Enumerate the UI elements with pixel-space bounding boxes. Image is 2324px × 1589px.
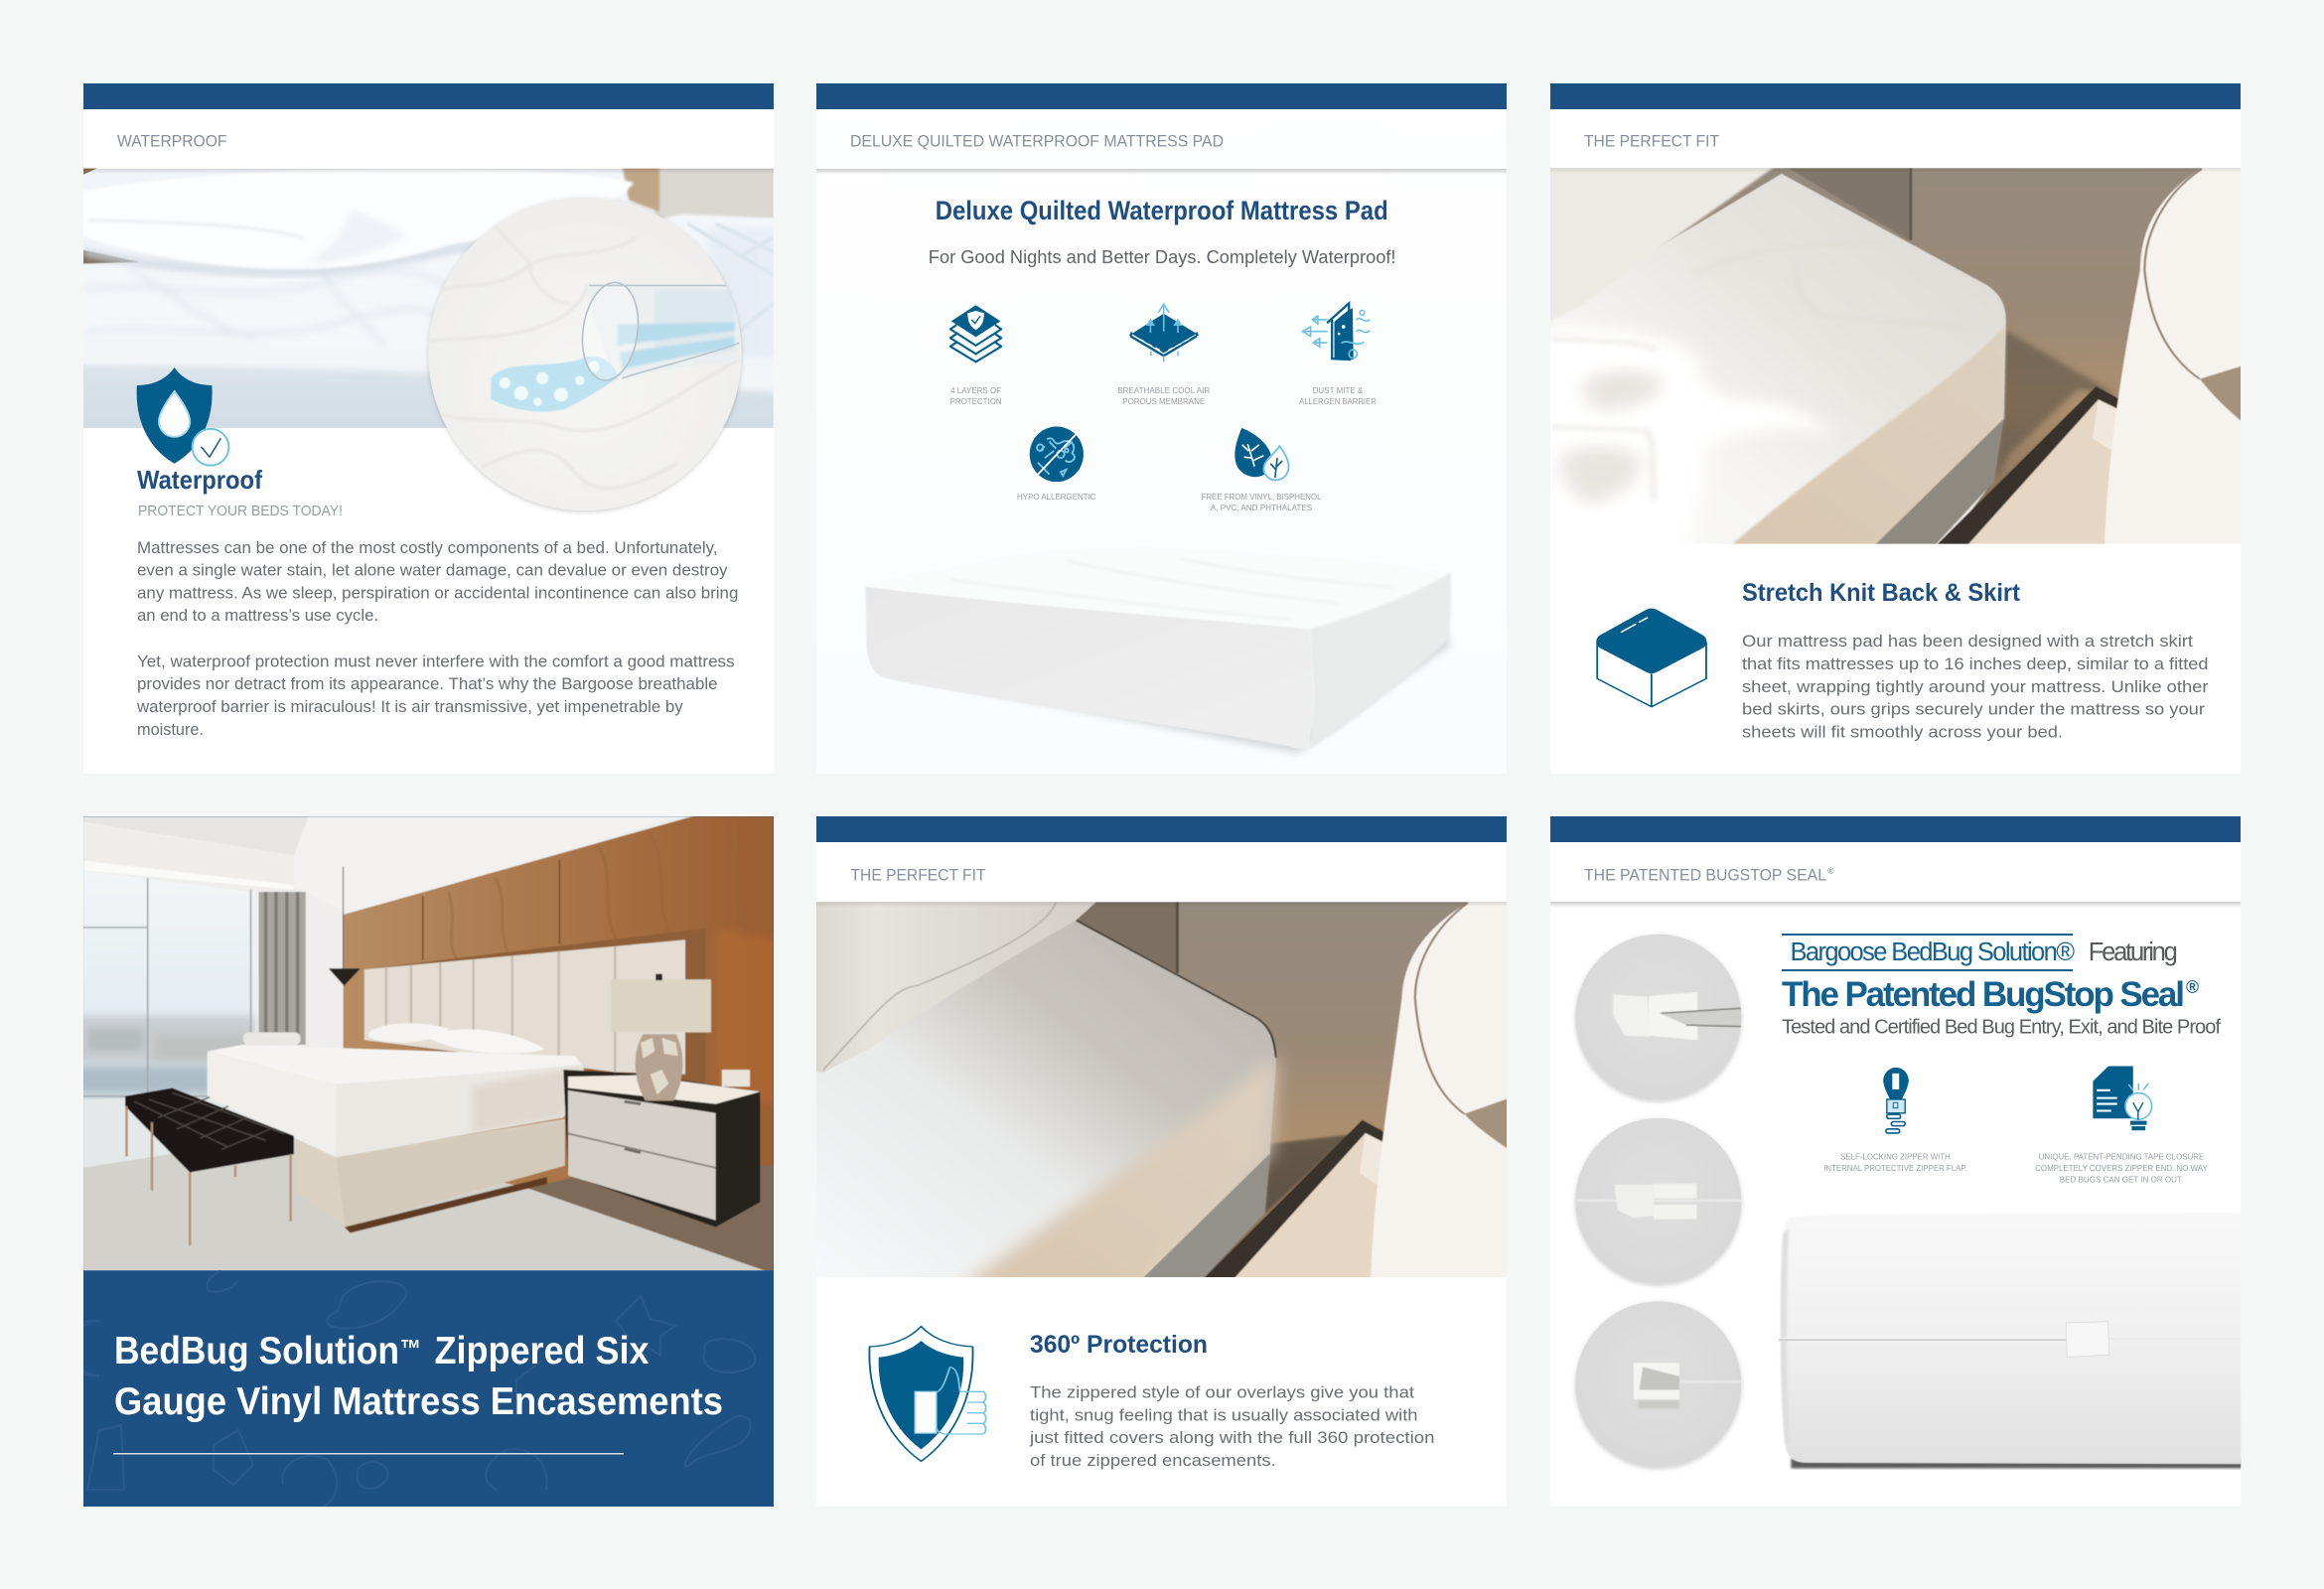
icon: breathable membrane — [1130, 304, 1198, 361]
circle photo: zipper closed with tape — [1575, 1118, 1745, 1284]
icon labels: mattress pad features: A, PVC, AND PHTHALATES — [1211, 503, 1312, 512]
body text: waterproof — [136, 539, 738, 739]
icon labels: bugstop seal: UNIQUE, PATENT-PENDING TAPE CLOSURE — [2039, 1152, 2205, 1162]
icon: stretch skirt box — [1596, 609, 1706, 707]
body text: waterproof: any mattress. As we sleep, perspiration or accidental incontinence can also bring — [137, 584, 738, 602]
title: The Patented BugStop Seal: ® — [2186, 977, 2199, 997]
icon labels: bugstop seal: SELF-LOCKING ZIPPER WITH — [1840, 1152, 1951, 1162]
top bar: stretch knit panel — [1550, 83, 2241, 109]
title: BedBug Solution Zippered Six Gauge Vinyl Mattress Encasements: BedBug Solution — [114, 1330, 399, 1372]
title underline — [113, 1453, 624, 1454]
icon labels: mattress pad features: DUST MITE & — [1313, 385, 1363, 395]
icon: self-locking zipper — [1883, 1068, 1909, 1133]
top bar: bugstop panel — [1550, 816, 2241, 842]
icon labels: mattress pad features: ALLERGEN BARRIER — [1299, 396, 1377, 406]
seal detail photos and mattress drawing — [1575, 935, 2260, 1468]
photo: smooth encasement corner beside nightstand — [816, 902, 1507, 1277]
icon row: mattress pad features — [950, 303, 1370, 482]
icon labels: mattress pad features: FREE FROM VINYL, BISPHENOL — [1202, 492, 1322, 502]
header: DELUXE QUILTED WATERPROOF MATTRESS PAD: DELUXE QUILTED WATERPROOF MATTRESS PAD — [850, 131, 1224, 151]
icon labels: bugstop seal: BED BUGS CAN GET IN OR OUT. — [2060, 1174, 2183, 1184]
circle photo: sealed zipper tab — [1575, 1301, 1743, 1468]
subtitle: For Good Nights and Better Days. Completely Waterproof! — [929, 247, 1396, 267]
title: BedBug Solution Zippered Six Gauge Vinyl Mattress Encasements: Zippered Six — [435, 1330, 650, 1372]
body text: 360 protection — [1029, 1384, 1434, 1470]
subheading: PROTECT YOUR BEDS TODAY! — [138, 504, 343, 519]
illustration: quilted mattress pad — [865, 547, 1451, 753]
icon labels: bugstop seal: COMPLETELY COVERS ZIPPER END. NO WAY — [2035, 1163, 2208, 1173]
illustration: zippered mattress encasement — [1779, 1212, 2260, 1468]
title: The Patented BugStop Seal: The Patented BugStop Seal — [1782, 975, 2185, 1014]
photo: hotel bedroom — [69, 805, 791, 1279]
icon labels: mattress pad features: 4 LAYERS OF — [950, 385, 1001, 395]
heading: Bargoose BedBug Solution Featuring: Featuring — [2089, 939, 2178, 966]
icon labels: mattress pad features — [950, 385, 1377, 512]
header: WATERPROOF: WATERPROOF — [117, 131, 226, 151]
body text: 360 protection: tight, snug feeling that is usually associated with — [1030, 1406, 1418, 1424]
header: THE PERFECT FIT: THE PERFECT FIT — [1584, 131, 1719, 151]
body text: 360 protection: of true zippered encasements. — [1030, 1452, 1276, 1470]
icons: zipper and tape closure — [1883, 1066, 2152, 1133]
icon: shield with thumbs up — [869, 1327, 986, 1461]
heading: Stretch Knit Back & Skirt: Stretch Knit Back & Skirt — [1742, 579, 2021, 607]
heading: Waterproof: Waterproof — [137, 465, 262, 495]
body text: waterproof: Yet, waterproof protection must never interfere with the comfort a good mattress — [137, 653, 735, 671]
body text: waterproof: Mattresses can be one of the most costly components of a bed. Unfortunately, — [137, 539, 718, 557]
title: BedBug Solution Zippered Six Gauge Vinyl Mattress Encasements: Gauge Vinyl Mattress Encasements — [114, 1380, 723, 1423]
panel: the patented bugstop seal — [1550, 816, 2260, 1507]
panel: deluxe quilted mattress pad — [816, 83, 1507, 774]
icon labels: bugstop seal — [1823, 1152, 2208, 1184]
title: BedBug Solution Zippered Six Gauge Vinyl Mattress Encasements — [114, 1330, 723, 1423]
panel: the perfect fit, stretch knit — [1532, 83, 2263, 774]
icon: four layers — [950, 305, 1001, 361]
body text: waterproof: provides nor detract from its appearance. That’s why the Bargoose breathable — [137, 675, 718, 693]
header: THE PATENTED BUGSTOP SEAL: THE PATENTED BUGSTOP SEAL — [1584, 866, 1826, 884]
icon: free from vinyl leaf — [1235, 428, 1289, 480]
top bar: mattress pad panel — [816, 83, 1507, 109]
body text: waterproof: moisture. — [137, 721, 204, 739]
body text: stretch knit: sheets will fit smoothly across your bed. — [1742, 723, 2063, 741]
body text: 360 protection: just fitted covers along with the full 360 protection — [1029, 1429, 1434, 1447]
top bar: 360 panel — [816, 816, 1507, 842]
title: BedBug Solution Zippered Six Gauge Vinyl Mattress Encasements: ™ — [400, 1334, 421, 1364]
panel: bedroom and encasement title — [67, 805, 791, 1507]
body text: stretch knit: that fits mattresses up to 16 inches deep, similar to a fitted — [1742, 655, 2209, 673]
icon labels: bugstop seal: INTERNAL PROTECTIVE ZIPPER FLAP. — [1823, 1163, 1967, 1173]
body text: stretch knit: sheet, wrapping tightly around your mattress. Unlike other — [1742, 678, 2209, 696]
subtitle: tested and certified: Tested and Certified Bed Bug Entry, Exit, and Bite Proof — [1782, 1017, 2221, 1039]
body text: waterproof: waterproof barrier is miraculous! It is air transmissive, yet impenetrable by — [136, 698, 683, 716]
decorative night pattern on the blue band — [67, 1270, 755, 1507]
photo: quilted pad corner beside nightstand — [1550, 168, 2241, 544]
icon: document and bulb — [2093, 1066, 2152, 1130]
heading: Bargoose BedBug Solution Featuring: Bargoose BedBug Solution® — [1790, 939, 2075, 966]
icon: dust mite barrier — [1302, 303, 1370, 360]
heading: Bargoose BedBug Solution Featuring — [1782, 934, 2178, 971]
icon labels: mattress pad features: PROTECTION — [950, 396, 1002, 406]
icon labels: mattress pad features: HYPO ALLERGENTIC — [1017, 492, 1096, 502]
panel: the perfect fit, 360 protection — [799, 816, 1529, 1507]
photo: pillow and quilted mattress with glass of water — [73, 153, 796, 510]
circle photo: zipper being pulled — [1575, 935, 1743, 1100]
icon labels: mattress pad features: POROUS MEMBRANE — [1122, 396, 1205, 406]
body text: waterproof: an end to a mattress’s use cycle. — [137, 607, 378, 625]
top bar: waterproof panel — [83, 83, 774, 109]
body text: 360 protection: The zippered style of our overlays give you that — [1030, 1384, 1414, 1402]
body text: stretch knit — [1742, 633, 2209, 741]
panel: waterproof — [73, 83, 796, 774]
body text: waterproof: even a single water stain, let alone water damage, can devalue or even destroy — [137, 562, 728, 580]
icon labels: mattress pad features: BREATHABLE COOL AIR — [1117, 385, 1210, 395]
body text: stretch knit: bed skirts, ours grips securely under the mattress so your — [1742, 701, 2206, 719]
icon: hypo allergenic — [1030, 426, 1084, 482]
heading: 360 Protection: 360º Protection — [1030, 1331, 1208, 1359]
header: THE PERFECT FIT: THE PERFECT FIT — [850, 866, 985, 884]
header: THE PATENTED BUGSTOP SEAL: ® — [1827, 866, 1834, 876]
inset circle: water spilling on quilted fabric — [428, 198, 742, 510]
body text: stretch knit: Our mattress pad has been designed with a stretch skirt — [1742, 633, 2193, 650]
icon: shield with water drop and check — [137, 367, 228, 466]
title: Deluxe Quilted Waterproof Mattress Pad: Deluxe Quilted Waterproof Mattress Pad — [936, 196, 1388, 225]
